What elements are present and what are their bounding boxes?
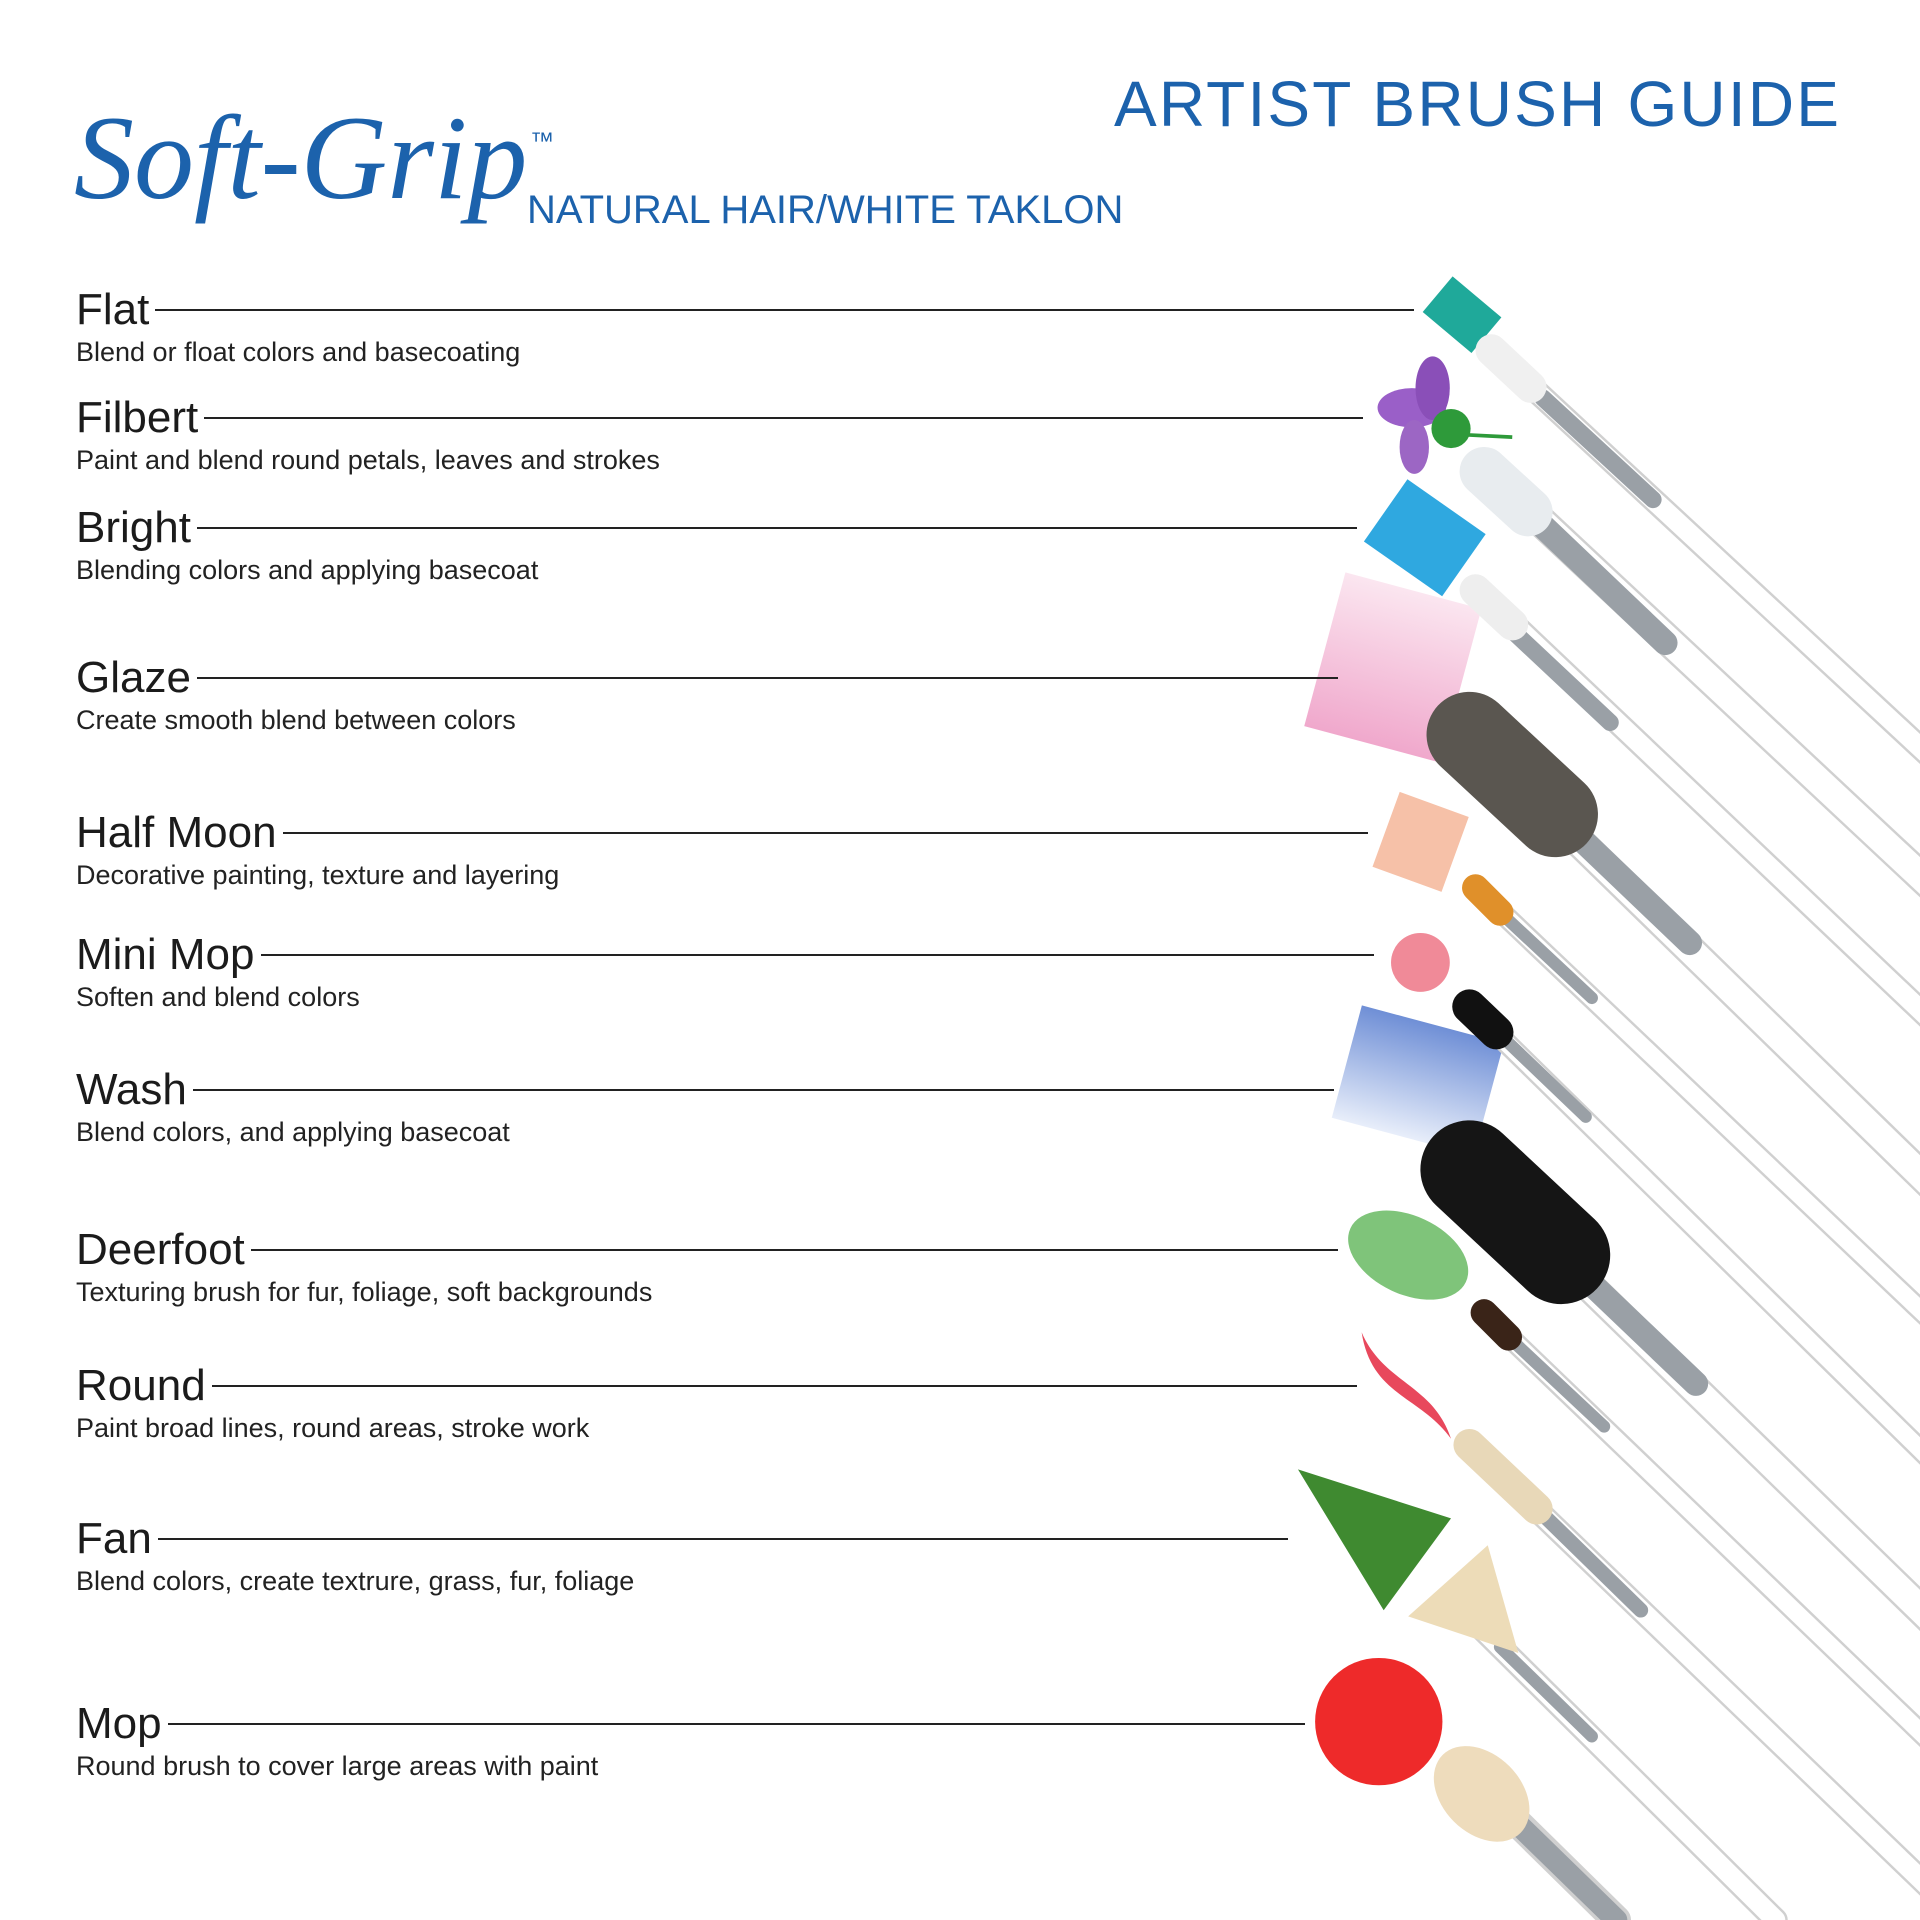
row: Mop: Round brush to cover large areas with paint [76, 1751, 598, 1781]
row: Mini Mop: Soften and blend colors [76, 982, 360, 1012]
row: Mop: Mop [76, 1699, 162, 1748]
row: Filbert: Filbert [76, 393, 198, 442]
row: Round: Round [76, 1361, 206, 1410]
brushes [1408, 350, 1920, 1920]
row: Glaze: Glaze [76, 653, 191, 702]
row: Flat: Flat [76, 285, 149, 334]
row: Bright: Bright [76, 503, 191, 552]
row: Wash: Blend colors, and applying basecoat [76, 1117, 510, 1147]
row: Bright [76, 503, 1357, 585]
row: Deerfoot: Texturing brush for fur, foliage, soft backgrounds [76, 1277, 652, 1307]
row: Fan: Fan [76, 1514, 152, 1563]
row: Mop [76, 1699, 1305, 1781]
row: Filbert [76, 393, 1363, 475]
row: Flat: Blend or float colors and basecoating [76, 337, 520, 367]
logo: Soft-Grip: Soft-Grip [74, 91, 527, 224]
row: Glaze: Create smooth blend between colors [76, 705, 516, 735]
title: ARTIST BRUSH GUIDE [1114, 68, 1841, 140]
row: Deerfoot: Deerfoot [76, 1225, 245, 1274]
row: Glaze [76, 653, 1338, 735]
row: Fan [76, 1514, 1288, 1596]
row: Fan: Blend colors, create textrure, grass, fur, foliage [76, 1566, 634, 1596]
row: Wash [76, 1065, 1334, 1147]
row: Half Moon: Half Moon [76, 808, 277, 857]
row: Round: Paint broad lines, round areas, stroke work [76, 1413, 589, 1443]
swatches [1298, 276, 1512, 1785]
row: Wash: Wash [76, 1065, 187, 1114]
trademark: ™ [530, 128, 554, 155]
row: Half Moon [76, 808, 1368, 890]
row: Round [76, 1361, 1357, 1443]
row: Half Moon: Decorative painting, texture and layering [76, 860, 559, 890]
subtitle: NATURAL HAIR/WHITE TAKLON [527, 188, 1123, 232]
row: Deerfoot [76, 1225, 1338, 1307]
row: Mini Mop [76, 930, 1374, 1012]
row: Mini Mop: Mini Mop [76, 930, 254, 979]
row: Bright: Blending colors and applying basecoat [76, 555, 538, 585]
row: Flat [76, 285, 1414, 367]
row: Filbert: Paint and blend round petals, leaves and strokes [76, 445, 660, 475]
